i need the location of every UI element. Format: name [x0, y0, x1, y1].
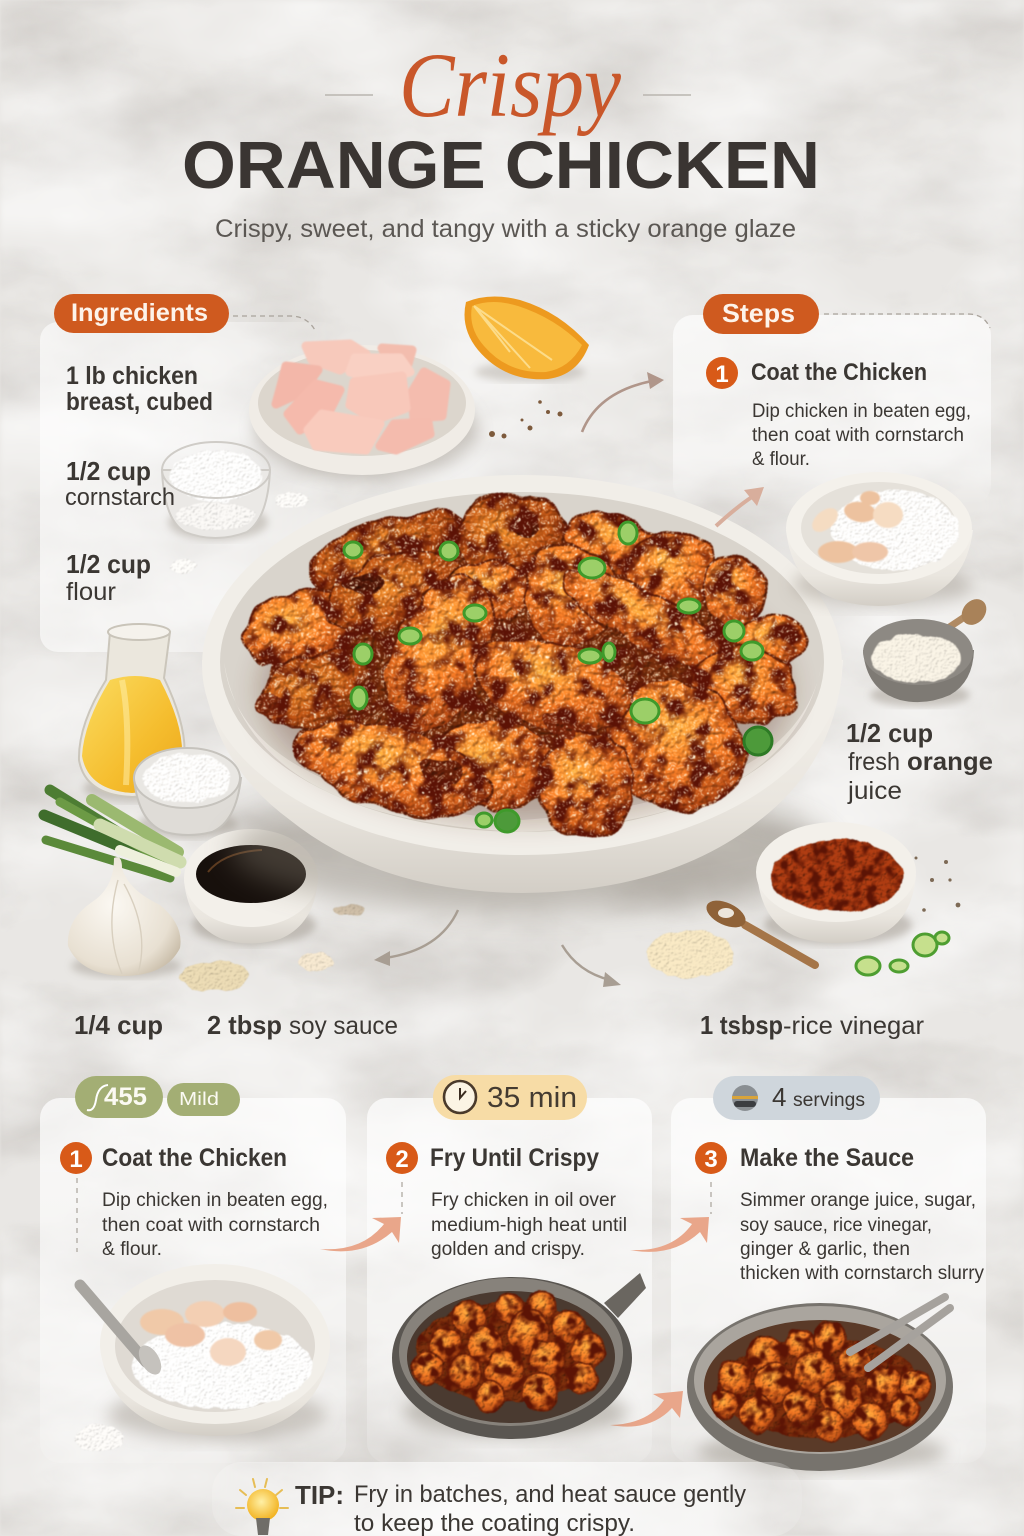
icon: oil jug — [79, 624, 187, 802]
step 2: fry until crispy: Fry chicken in oil over — [431, 1190, 617, 1211]
ingredient list: left column: cornstarch — [65, 484, 175, 511]
ingredient list: left column: flour — [66, 578, 116, 606]
decor: flour dust step 1 — [74, 1425, 126, 1451]
step 3: make the sauce: Make the Sauce — [740, 1144, 914, 1172]
icon: small rice bowl with spoon — [863, 594, 991, 707]
arrow: to soy sauce — [385, 910, 458, 958]
badge: spice level: Mild — [179, 1089, 219, 1109]
badge: servings: 4 — [772, 1082, 786, 1112]
steps heading pill — [703, 294, 990, 334]
arrow head: to soy sauce — [374, 951, 390, 966]
decor: flour dust — [170, 493, 311, 573]
step 2: fry until crispy — [386, 1142, 627, 1260]
badge: time: 35 min — [487, 1082, 577, 1114]
step 1 image: coating bowl with spoon — [80, 1264, 330, 1441]
ingredients heading pill: Ingredients — [71, 299, 208, 327]
badge: calories — [75, 1076, 163, 1118]
bottom ingredient labels: 1 tsbsp — [700, 1010, 783, 1040]
icon: spring onions — [44, 790, 180, 878]
step 3: make the sauce: soy sauce, rice vinegar, — [740, 1215, 932, 1236]
panel: steps backdrop — [673, 315, 991, 505]
main title: ORANGE CHICKEN — [182, 128, 820, 203]
tip text: TIP: — [295, 1480, 344, 1510]
orange juice label: orange — [907, 748, 993, 776]
step 3: make the sauce: ginger & garlic, then — [740, 1239, 910, 1260]
decor: breadcrumbs left — [181, 904, 365, 991]
badge: servings: servings — [793, 1090, 865, 1111]
step 1: coat the chicken: & flour. — [102, 1239, 162, 1260]
step 1: coat the chicken: Dip chicken in beaten egg, — [102, 1190, 328, 1211]
steps panel: step 1 summary: & flour. — [752, 449, 810, 470]
icon: cornstarch glass — [162, 442, 270, 540]
chicken pile — [234, 494, 806, 843]
icon: coated chicken bowl — [786, 472, 973, 607]
step 3 image: sauce pan with tongs — [687, 1297, 953, 1472]
icon: chili sauce bowl — [756, 822, 916, 945]
scallion rings — [344, 522, 772, 832]
bottom ingredient labels: 2 tbsp — [207, 1010, 282, 1040]
panel: step 1 card — [40, 1098, 346, 1463]
arrow: step 2 to 3 — [630, 1217, 709, 1252]
ingredient list: left column: 1/2 cup — [66, 456, 151, 486]
step 1: coat the chicken: then coat with cornstarch — [102, 1215, 320, 1236]
icon: garlic bulb — [68, 857, 181, 978]
icon: orange wedge — [464, 296, 589, 382]
arrow: step 1 to 2 — [320, 1217, 401, 1251]
badge: calories: 455 — [104, 1083, 147, 1111]
bottom ingredient labels: -rice vinegar — [783, 1012, 924, 1040]
arrow: pan to pan — [610, 1391, 683, 1427]
step 2: fry until crispy: medium-high heat until — [431, 1215, 627, 1236]
steps panel: step 1 summary: 1 — [715, 361, 729, 388]
panel: ingredients backdrop — [40, 322, 340, 652]
icon: raw chicken plate — [249, 344, 478, 478]
ingredient list: left column: 1 lb chicken — [66, 362, 198, 390]
bottom ingredient labels — [74, 1010, 924, 1040]
icon: soy sauce bowl — [184, 829, 318, 945]
decor: spice specks near orange — [489, 400, 562, 438]
ingredient list: left column: 1/2 cup — [66, 549, 151, 579]
icon: small flour bowl — [134, 748, 241, 838]
step 3: make the sauce: Simmer orange juice, sugar, — [740, 1190, 976, 1211]
step 1: coat the chicken — [60, 1142, 328, 1260]
title block — [182, 34, 820, 243]
orange juice label: fresh — [848, 748, 900, 776]
bottom ingredient labels: 1/4 cup — [74, 1010, 163, 1040]
step 3: make the sauce: 3 — [704, 1146, 718, 1173]
script title Crispy: Crispy — [399, 34, 621, 136]
arrow: to rice vinegar — [562, 945, 610, 980]
tip panel: Fry in batches, and heat sauce gently — [354, 1481, 746, 1508]
orange juice label: 1/2 cup — [846, 718, 933, 748]
steps heading pill: Steps — [722, 298, 795, 328]
steps panel: step 1 summary: Dip chicken in beaten egg, — [752, 401, 971, 422]
badge: spice level — [167, 1083, 240, 1116]
icon: light bulb — [236, 1479, 288, 1535]
orange juice label — [846, 718, 993, 805]
arrow head: top curved — [647, 372, 664, 389]
tip panel — [212, 1462, 802, 1536]
steps panel: step 1 summary: then coat with cornstarch — [752, 425, 964, 446]
bottom ingredient labels: soy sauce — [289, 1012, 398, 1040]
step 1: coat the chicken: Coat the Chicken — [102, 1144, 287, 1172]
step 2: fry until crispy: 2 — [395, 1146, 409, 1173]
panel: step 3 card — [671, 1098, 986, 1463]
arrow head: to rice vinegar — [603, 972, 621, 987]
arrow: bowl to coat bowl — [716, 497, 752, 526]
ingredient list: left column: breast, cubed — [66, 388, 213, 416]
main bowl — [202, 475, 843, 912]
step 2: fry until crispy: golden and crispy. — [431, 1239, 585, 1260]
decor: breadcrumbs right — [646, 930, 734, 978]
panel: step 2 card — [367, 1098, 652, 1463]
step 3: make the sauce: thicken with cornstarch slurry — [740, 1263, 984, 1284]
steps panel: step 1 summary — [706, 357, 971, 470]
ingredients heading pill — [54, 294, 316, 333]
decor: scallion pieces and pepper — [856, 856, 960, 975]
icon: wooden spoon with crumbs — [702, 895, 815, 965]
step 2 image: frying pan — [392, 1273, 646, 1439]
steps panel: step 1 summary: Coat the Chicken — [751, 359, 927, 386]
ingredient list: left column — [65, 362, 213, 606]
arrow head: bowl to coat — [744, 487, 764, 506]
badge: servings — [713, 1076, 880, 1120]
step 1: coat the chicken: 1 — [69, 1146, 83, 1173]
step 3: make the sauce — [695, 1142, 984, 1284]
step 2: fry until crispy: Fry Until Crispy — [430, 1144, 599, 1172]
badge: time — [433, 1075, 587, 1120]
orange juice label: juice — [847, 777, 902, 805]
subtitle: Crispy, sweet, and tangy with a sticky orange glaze — [215, 215, 796, 243]
arrow: top curved to steps — [582, 381, 652, 432]
